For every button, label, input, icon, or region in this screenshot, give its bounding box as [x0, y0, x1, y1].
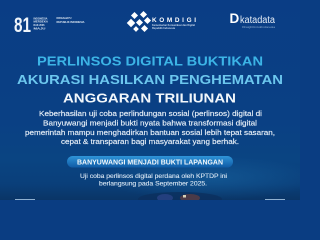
- intro text block: Keberhasilan uji coba perlindungan sosial (perlinsos) digital di: [39, 109, 262, 118]
- logo: 81 anniversary: [14, 14, 48, 37]
- title: ANGGARAN TRILIUNAN: [63, 92, 236, 106]
- intro text block: cepat & transparan bagi masyarakat yang berhak.: [61, 137, 239, 146]
- title: PERLINSOS DIGITAL BUKTIKAN: [37, 54, 263, 68]
- title: AKURASI HASILKAN PENGHEMATAN: [17, 73, 283, 87]
- note text block: Uji coba perlinsos digital perdana oleh KPTDP ini: [80, 173, 227, 180]
- background: [0, 0, 300, 200]
- logo text: Indonesia: MAJU: [34, 26, 46, 30]
- callout: section heading pill: [67, 156, 233, 168]
- logo text: katadata: katadata: [240, 15, 275, 26]
- logo text: Indonesia: INDONESIA: [34, 16, 48, 20]
- note text block: berlangsung pada September 2025.: [99, 180, 207, 188]
- callout: section heading pill: BANYUWANGI MENJADI BUKTI LAPANGAN: [77, 160, 223, 166]
- logo text: Dirgahayu Republik Indonesia: REPUBLIK INDONESIA: [56, 20, 85, 24]
- icon: number 81: 81: [14, 14, 31, 37]
- logo: Komdigi: [127, 11, 196, 32]
- intro text block: [25, 109, 275, 146]
- icon: Komdigi checker mark: [127, 11, 151, 32]
- logo text: KOMDIGI: KOMDIGI: [152, 17, 196, 24]
- intro text block: Banyuwangi menjadi bukti nyata bahwa transformasi digital: [43, 118, 257, 128]
- logo text: Indonesia: RAK 2026: [34, 23, 45, 27]
- note text block: [80, 173, 227, 188]
- background glow and seabed scene: [15, 156, 320, 206]
- logo subtitle: [152, 24, 195, 30]
- logo subtitle: #InsightUntukIndonesia: [242, 25, 275, 29]
- logo text: Indonesia: [34, 16, 48, 30]
- logo: Katadata: [230, 11, 275, 29]
- logo text: Dirgahayu Republik Indonesia: [56, 16, 85, 24]
- logo subtitle: Kementerian Komunikasi dan Digital: [152, 24, 195, 27]
- logo subtitle: Republik Indonesia: [152, 27, 176, 30]
- intro text block: pemerintah mampu menghadirkan bantuan sosial lebih tepat sasaran,: [25, 128, 275, 137]
- title: [17, 54, 283, 106]
- logo text: Dirgahayu Republik Indonesia: DIRGAHAYU: [56, 16, 72, 20]
- logo text: Indonesia: MERDEKA: [34, 20, 48, 24]
- icon: D mark: D: [230, 11, 240, 26]
